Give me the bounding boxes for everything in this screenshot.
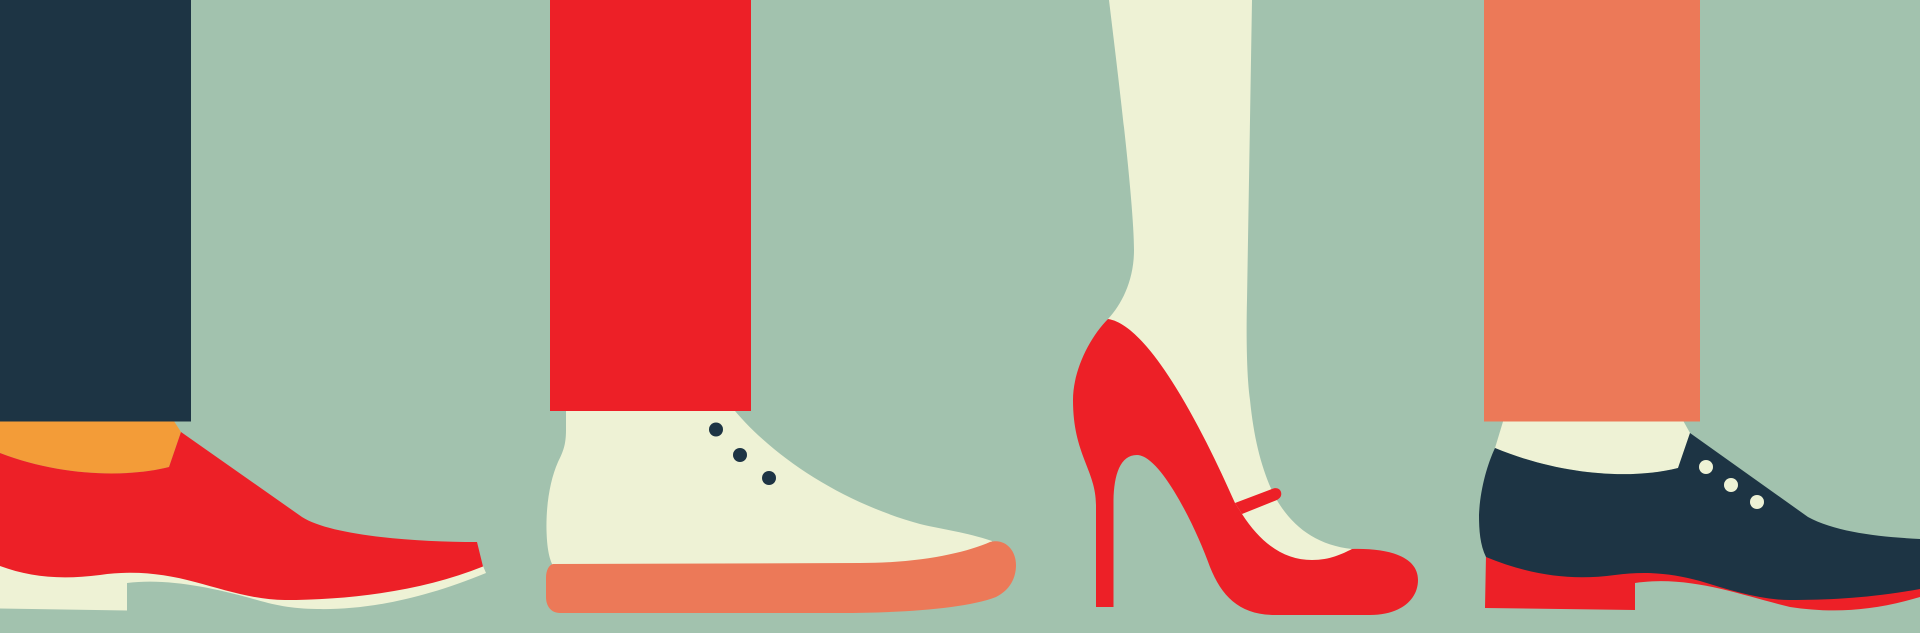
figure 1: navy trousers and red shoe bbox=[0, 0, 486, 610]
salmon trouser leg bbox=[1484, 0, 1700, 422]
ankle strap bbox=[1235, 488, 1281, 514]
navy shoe upper bbox=[1479, 433, 1920, 600]
navy eyelets bbox=[709, 422, 776, 485]
cream eyelets bbox=[1699, 460, 1764, 509]
salmon sole bbox=[546, 541, 1016, 613]
cream leg bbox=[1100, 0, 1352, 565]
red trouser leg bbox=[550, 0, 751, 411]
figure 2: red trousers and cream sneaker bbox=[546, 0, 1016, 613]
red shoe upper bbox=[0, 432, 483, 600]
navy trouser leg bbox=[0, 0, 191, 422]
cream sneaker upper bbox=[546, 405, 992, 572]
cream sock bbox=[1495, 415, 1690, 474]
orange sock bbox=[0, 415, 181, 473]
figure 3: bare leg and red high heel bbox=[1073, 0, 1418, 615]
red high-heel shoe bbox=[1073, 319, 1418, 615]
red sole and heel bbox=[1485, 555, 1920, 610]
figure 4: salmon trousers and navy shoe bbox=[1479, 0, 1920, 610]
cream sole and heel bbox=[0, 560, 486, 610]
